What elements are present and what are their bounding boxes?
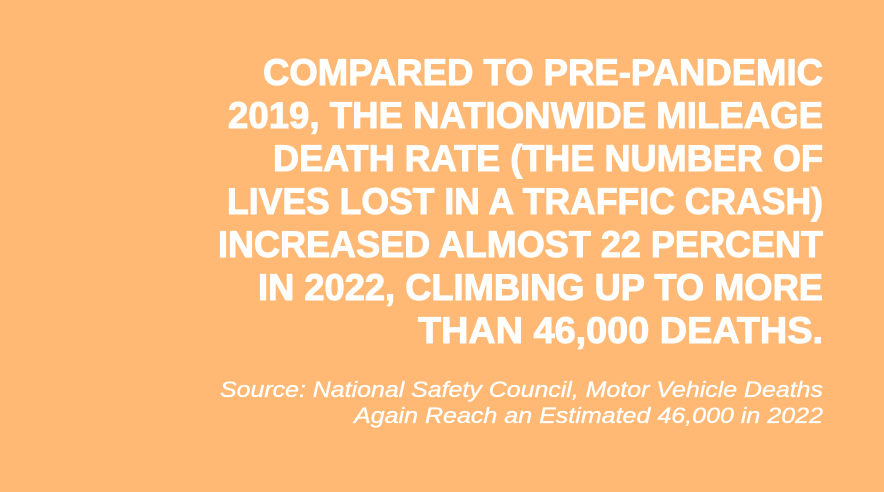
main statement text: LIVES LOST IN A TRAFFIC CRASH)	[227, 181, 823, 222]
main statement text: DEATH RATE (THE NUMBER OF	[273, 138, 823, 179]
main statement text: THAN 46,000 DEATHS.	[418, 310, 823, 351]
main statement text: INCREASED ALMOST 22 PERCENT	[218, 224, 823, 265]
main statement text	[218, 52, 823, 351]
main statement text: IN 2022, CLIMBING UP TO MORE	[258, 267, 823, 308]
source citation	[220, 377, 824, 428]
main statement text: 2019, THE NATIONWIDE MILEAGE	[228, 95, 823, 136]
source citation: Source: National Safety Council, Motor Vehicle Deaths	[220, 377, 823, 402]
source citation: Again Reach an Estimated 46,000 in 2022	[352, 403, 824, 428]
main statement text: COMPARED TO PRE-PANDEMIC	[263, 52, 823, 93]
